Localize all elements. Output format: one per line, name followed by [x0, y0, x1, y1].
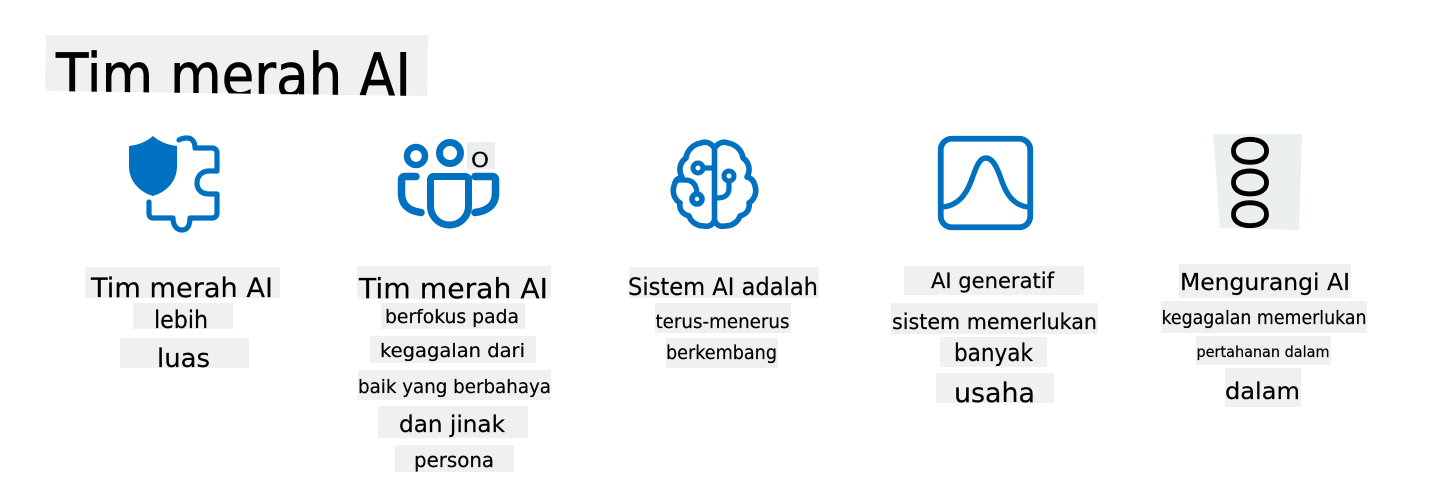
label column 1: Tim merah AI lebih luas: [85, 267, 280, 374]
icon: people group: [402, 142, 496, 225]
text line: lebih: [133, 303, 233, 334]
text line: terus-menerus: terus-menerus: [656, 312, 790, 333]
title: [45, 35, 428, 96]
text line: sistem memerlukan: sistem memerlukan: [892, 310, 1097, 334]
text line: pertahanan dalam: [1196, 336, 1331, 365]
text line: Mengurangi AI: Mengurangi AI: [1180, 270, 1350, 296]
text line: persona: [395, 445, 514, 472]
icon: bell curve chart: [941, 139, 1030, 227]
text line: luas: luas: [157, 344, 210, 374]
label column 2: Tim merah AI berfokus pada kegagalan: [357, 266, 551, 472]
text line: lebih: lebih: [154, 306, 208, 334]
text line: dan jinak: dan jinak: [399, 412, 506, 438]
label column 3: Sistem AI adalah terus-menerus berkembang: [628, 267, 819, 368]
text line: Tim merah AI: Tim merah AI: [90, 273, 273, 304]
label column 5: Mengurangi AI kegagalan memerlukan pertahanan dalam: [1161, 264, 1367, 407]
text line: usaha: [936, 373, 1054, 409]
icon: brain circuit: [673, 142, 756, 226]
text line: pertahanan dalam: pertahanan dalam: [1196, 343, 1330, 361]
title: Tim merah AI: [55, 41, 411, 111]
text line: AI generatif: AI generatif: [931, 269, 1055, 293]
text line: banyak: banyak: [954, 339, 1033, 367]
text line: persona: persona: [414, 448, 494, 472]
text line: dalam: dalam: [1225, 379, 1300, 405]
text line: kegagalan dari: [370, 336, 536, 363]
text line: dalam: [1225, 368, 1301, 407]
label column 4: AI generatif sistem memerlukan banyak usaha: [891, 266, 1098, 409]
text line: dan jinak: [378, 406, 528, 438]
text line: usaha: usaha: [954, 378, 1035, 409]
icon: three stacked ovals: OOO: [1220, 135, 1277, 230]
icon: three stacked ovals: [1213, 134, 1302, 230]
text line: AI generatif: [904, 266, 1084, 295]
icon: shield and puzzle piece: [129, 136, 217, 230]
text line: kegagalan memerlukan: [1161, 301, 1367, 333]
text line: berfokus pada: berfokus pada: [385, 306, 519, 328]
icon patch: letter O: O: [471, 148, 489, 172]
text line: kegagalan dari: kegagalan dari: [380, 340, 525, 362]
text line: terus-menerus: [655, 303, 791, 333]
text line: Tim merah AI: Tim merah AI: [358, 272, 548, 305]
text line: luas: [120, 338, 249, 374]
